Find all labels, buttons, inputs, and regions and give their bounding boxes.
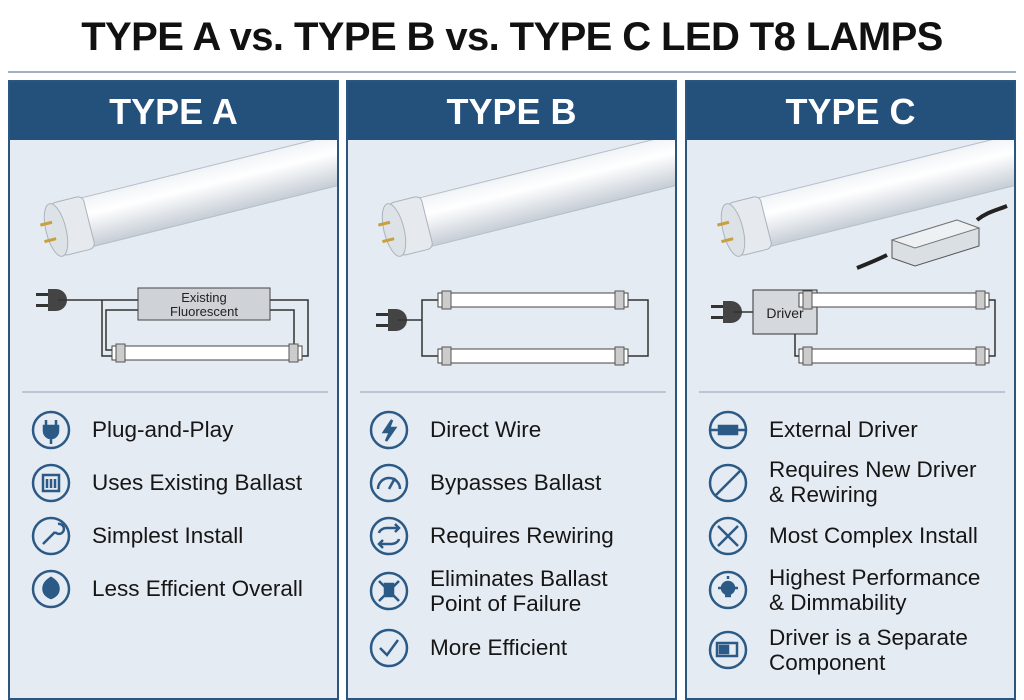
- panel: type C: Most Complex Install: [769, 523, 978, 548]
- image: LED tube C with driver: [713, 116, 1024, 260]
- panel: type C: Requires New Driver: [769, 457, 977, 482]
- image: LED tube B: [374, 116, 754, 260]
- panel: type A: Uses Existing Ballast: [92, 470, 302, 495]
- image: LED tube A: [36, 116, 416, 260]
- diagram: driver circuit: [711, 290, 995, 365]
- icons B: [371, 412, 407, 666]
- panel: type A: [8, 80, 339, 700]
- heading: type C: [687, 82, 1014, 140]
- panel: type C: & Dimmability: [769, 590, 907, 615]
- features C: External Driver: [769, 417, 918, 442]
- heading: type C: TYPE C: [785, 91, 916, 132]
- panel: type C: Highest Performance: [769, 565, 980, 590]
- panel: type A: Simplest Install: [92, 523, 243, 548]
- panel: type B: [346, 80, 677, 700]
- panel: type C: & Rewiring: [769, 482, 878, 507]
- diagram: direct wire: [376, 291, 648, 365]
- panel: type A: Less Efficient Overall: [92, 576, 303, 601]
- panel: type B: Requires Rewiring: [430, 523, 614, 548]
- icons C: [710, 412, 746, 668]
- title: TYPE A vs. TYPE B vs. TYPE C LED T8 LAMPS: [81, 15, 943, 59]
- diagram: ballast circuit: Fluorescent: [170, 304, 238, 319]
- features A: Plug-and-Play: [92, 417, 233, 442]
- icons A: [33, 412, 69, 607]
- diagram: ballast circuit: [36, 288, 308, 362]
- panel: type C: Component: [769, 650, 885, 675]
- heading: type B: TYPE B: [446, 91, 577, 132]
- panel: type B: Eliminates Ballast: [430, 566, 608, 591]
- panel: type B: Bypasses Ballast: [430, 470, 601, 495]
- panel: type B: Point of Failure: [430, 591, 581, 616]
- features B: Direct Wire: [430, 417, 541, 442]
- panel: type B: More Efficient: [430, 635, 567, 660]
- panel: type C: Driver is a Separate: [769, 625, 968, 650]
- heading: type B: [348, 82, 675, 140]
- diagram: ballast circuit: Existing: [181, 290, 227, 305]
- panel: type C: [685, 80, 1016, 700]
- heading: type A: TYPE A: [109, 91, 238, 132]
- heading: type A: [10, 82, 337, 140]
- diagram: driver circuit: Driver: [766, 305, 804, 321]
